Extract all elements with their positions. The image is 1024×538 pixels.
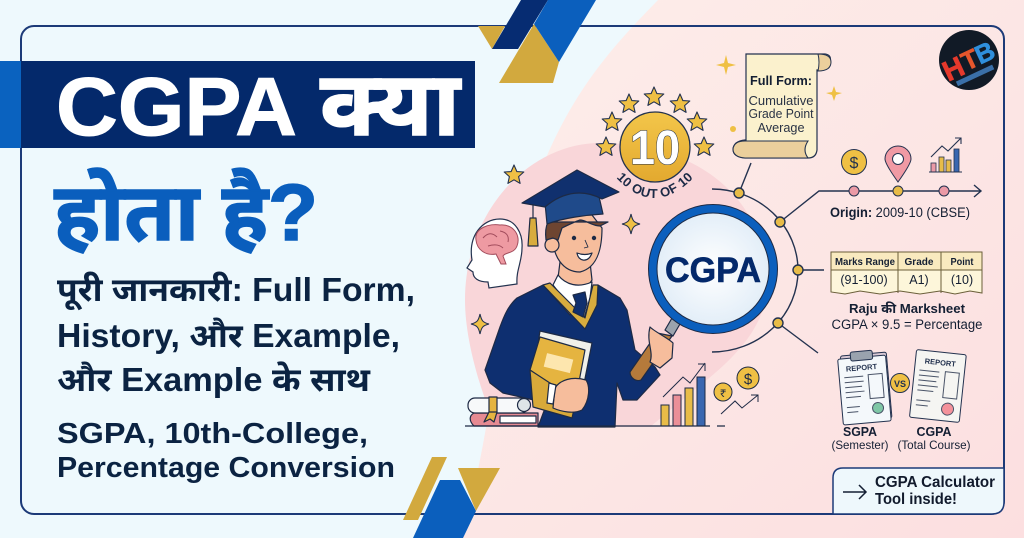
report SGPA vs CGPA bbox=[837, 349, 966, 425]
logo HTB: B bbox=[970, 35, 1000, 70]
report labels: CGPA bbox=[916, 424, 952, 439]
gold V trim bbox=[543, 283, 598, 329]
growth chart and coins: ₹ bbox=[720, 386, 726, 400]
scroll full form: Full Form: bbox=[750, 73, 812, 88]
subheading tags bbox=[57, 418, 395, 484]
subheading bbox=[57, 271, 415, 398]
subheading tags: Percentage Conversion bbox=[57, 452, 395, 484]
marks table: Point bbox=[950, 256, 974, 268]
coin 10 out of 10 bbox=[596, 86, 714, 198]
marks table bbox=[831, 252, 982, 294]
report SGPA vs CGPA: REPORT bbox=[846, 362, 878, 374]
connector arc and nodes bbox=[712, 163, 981, 353]
logo HTB: T bbox=[956, 43, 983, 77]
decoration: top chevrons bbox=[478, 0, 596, 83]
scroll full form: Grade Point bbox=[748, 107, 814, 121]
icon: head with brain bbox=[467, 219, 522, 288]
marks table: (10) bbox=[951, 273, 973, 287]
title banner: CGPA bbox=[56, 60, 297, 153]
report labels: (Semester) bbox=[832, 438, 889, 452]
report SGPA vs CGPA: REPORT bbox=[924, 357, 957, 369]
mortarboard bbox=[522, 170, 619, 246]
callout calculator bbox=[833, 468, 1004, 514]
title banner bbox=[0, 55, 475, 155]
coin 10 out of 10: 10 bbox=[630, 122, 680, 175]
report labels: (Total Course) bbox=[898, 438, 971, 452]
scroll full form: Cumulative bbox=[748, 94, 814, 108]
marksheet caption: Raju की Marksheet bbox=[849, 301, 966, 316]
hair bbox=[546, 220, 608, 240]
background: pink right side bbox=[462, 0, 1024, 538]
timeline icons bbox=[842, 138, 962, 196]
scroll full form bbox=[733, 54, 831, 158]
sparkles and stars bbox=[471, 55, 842, 334]
report SGPA vs CGPA: VS bbox=[894, 379, 906, 389]
origin label: Origin: 2009-10 (CBSE) bbox=[830, 205, 970, 220]
neck bbox=[558, 262, 592, 295]
timeline icons: $ bbox=[850, 155, 859, 172]
tie bbox=[573, 292, 587, 317]
heading second line: होता है? bbox=[54, 167, 318, 257]
student figure bbox=[468, 170, 680, 427]
collar bbox=[553, 275, 592, 318]
coin 10 out of 10: 10 OUT OF 10 bbox=[616, 173, 692, 198]
report labels bbox=[832, 424, 971, 452]
subheading tags: SGPA, 10th-College, bbox=[57, 418, 368, 450]
logo HTB bbox=[937, 30, 1001, 90]
logo HTB: H bbox=[938, 51, 969, 87]
callout calculator: CGPA Calculator bbox=[875, 474, 995, 491]
subheading: और Example के साथ bbox=[57, 360, 371, 398]
books and diploma bbox=[468, 397, 538, 426]
marks table: (91-100) bbox=[840, 273, 888, 287]
face details bbox=[572, 236, 596, 260]
marks table: Grade bbox=[904, 256, 934, 268]
pink blob behind student bbox=[465, 143, 767, 427]
growth chart and coins: $ bbox=[744, 371, 753, 388]
head bbox=[552, 215, 602, 272]
callout calculator: Tool inside! bbox=[875, 491, 957, 508]
book bbox=[530, 331, 592, 418]
report labels: SGPA bbox=[843, 424, 878, 439]
right hand bbox=[649, 327, 673, 368]
marks table: A1) bbox=[909, 273, 929, 287]
magnifier lens bbox=[648, 204, 778, 334]
marksheet caption: CGPA × 9.5 = Percentage bbox=[832, 317, 982, 332]
magnifier lens: CGPA bbox=[665, 251, 761, 290]
marksheet caption bbox=[832, 301, 982, 332]
subheading: पूरी जानकारी: Full Form, bbox=[57, 271, 415, 311]
gown bbox=[485, 285, 660, 427]
marks table: Marks Range bbox=[835, 256, 895, 268]
subheading: History, और Example, bbox=[57, 317, 400, 354]
decoration: bottom chevrons bbox=[403, 457, 500, 538]
title banner: क्या bbox=[320, 55, 462, 155]
magnifier handle bbox=[630, 318, 680, 381]
left hand bbox=[553, 378, 589, 412]
growth chart and coins bbox=[465, 363, 759, 426]
scroll full form: Average bbox=[758, 121, 805, 135]
